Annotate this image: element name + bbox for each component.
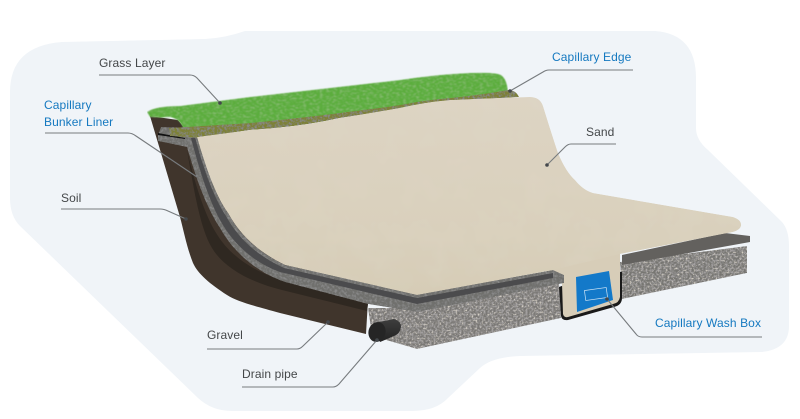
sand — [197, 97, 741, 295]
label: Soil: Soil — [61, 191, 81, 205]
label: Gravel — [207, 320, 330, 349]
blue label — [576, 271, 613, 312]
label: Capillary Bunker Liner: Bunker Liner — [44, 115, 113, 129]
bunker liner — [158, 127, 564, 312]
label: Drain pipe: Drain pipe — [242, 367, 298, 381]
gravel base right — [620, 246, 747, 299]
dark liner edge — [191, 137, 553, 304]
label: Capillary Bunker Liner — [44, 98, 197, 177]
grass layer — [147, 73, 508, 128]
wash box — [545, 250, 622, 320]
soil inner shadow — [187, 150, 368, 311]
soil layer — [150, 116, 368, 334]
label: Sand — [545, 125, 616, 167]
liner slab right — [622, 233, 750, 265]
pipe body — [374, 319, 401, 342]
label: Capillary Edge — [508, 50, 633, 93]
label: Capillary Wash Box: Capillary Wash Box — [655, 316, 761, 330]
capillary edge thatch — [169, 90, 519, 138]
gravel base front — [368, 282, 561, 349]
label: Sand: Sand — [586, 125, 614, 139]
label badge — [584, 288, 608, 300]
label: Drain pipe — [242, 338, 379, 387]
black liner slit — [158, 133, 185, 139]
pipe opening — [366, 320, 388, 344]
label: Capillary Bunker Liner: Capillary — [44, 98, 92, 112]
bunker cross-section illustration — [147, 73, 750, 349]
label: Capillary Wash Box — [605, 297, 762, 337]
label: Grass Layer: Grass Layer — [99, 56, 165, 70]
label: Gravel: Gravel — [207, 328, 243, 342]
box outline — [559, 272, 622, 320]
label: Soil — [61, 191, 188, 221]
drain pipe — [366, 319, 401, 344]
label: Capillary Edge: Capillary Edge — [552, 50, 632, 64]
box body — [545, 250, 620, 317]
label: Grass Layer — [99, 56, 222, 105]
